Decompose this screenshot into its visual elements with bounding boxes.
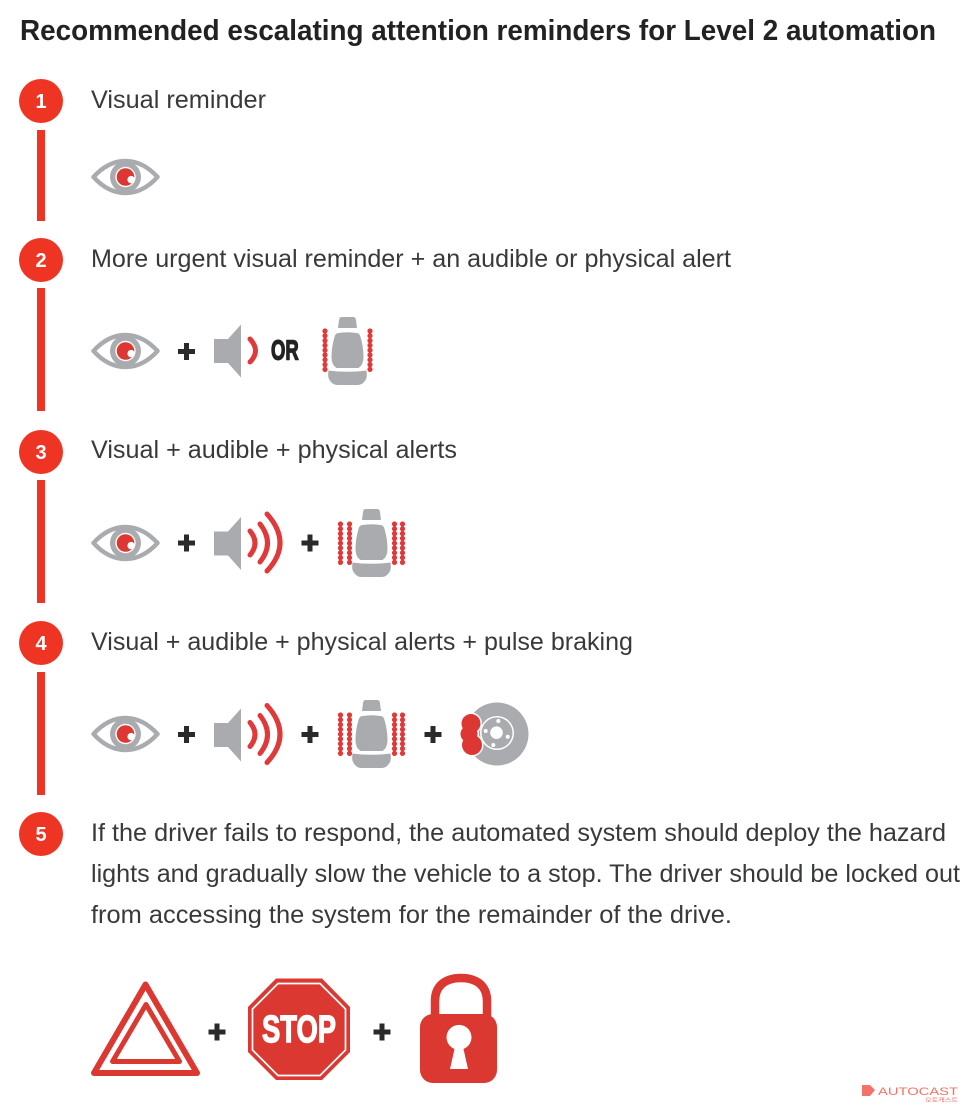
step 2 connector bar (37, 288, 45, 411)
step 1 number badge: 1 (35, 91, 47, 113)
step 2 label: More urgent visual reminder + an audible or physical alert (91, 245, 731, 273)
icon: strongly vibrating seat (340, 700, 402, 768)
plus (302, 534, 318, 552)
plus (302, 726, 318, 743)
step 3 (19, 430, 457, 603)
icon: speaker with three waves (214, 706, 280, 762)
icon: eye (94, 527, 158, 559)
icon: eye (94, 335, 158, 367)
step 4 label: Visual + audible + physical alerts + pulse braking (91, 628, 633, 656)
icon: speaker with three waves (214, 514, 280, 571)
icon: eye (94, 161, 158, 193)
OR label: OR (271, 336, 299, 367)
step 3 number badge (19, 430, 63, 474)
plus (374, 1024, 390, 1040)
step 1 (19, 79, 266, 221)
logo: Autocast watermark (862, 1085, 958, 1104)
step 4 connector bar (37, 672, 45, 795)
plus (178, 534, 195, 552)
logo: Autocast watermark: 오토캐스트 (925, 1096, 958, 1104)
plus (424, 726, 442, 743)
step 5 (19, 812, 960, 1083)
icon: padlock (420, 978, 497, 1083)
icon: brake disc and caliper (460, 702, 528, 766)
icon: stop sign (248, 978, 350, 1080)
icon: vibrating seat (325, 317, 370, 385)
icon: eye (94, 718, 158, 750)
step 3 connector bar (37, 480, 45, 603)
step 1 label: Visual reminder (91, 86, 266, 114)
step 4 number badge: 4 (35, 633, 47, 655)
step 2 number badge (19, 238, 63, 282)
step 2 number badge: 2 (35, 250, 47, 272)
icon: stop sign: STOP (262, 1009, 336, 1051)
step 3 label: Visual + audible + physical alerts (91, 436, 457, 464)
step 5 description: lights and gradually slow the vehicle to a stop. The driver should be locked out (91, 860, 960, 888)
step 5 number badge: 5 (35, 824, 47, 846)
step 3 number badge: 3 (35, 442, 47, 464)
step 5 number badge (19, 812, 63, 856)
step 1 connector bar (37, 130, 45, 221)
icon: strongly vibrating seat (340, 509, 402, 577)
title: Recommended escalating attention reminders for Level 2 automation (20, 15, 936, 47)
plus (178, 343, 195, 360)
step 5 description: from accessing the system for the remainder of the drive. (91, 901, 732, 929)
step 1 number badge (19, 79, 63, 123)
step 2 (19, 238, 731, 411)
step 5 description: If the driver fails to respond, the automated system should deploy the hazard (91, 819, 946, 847)
plus (208, 1024, 226, 1040)
step 5 description (91, 819, 960, 929)
plus (178, 726, 195, 743)
step 4 (19, 621, 633, 795)
logo: Autocast watermark: AUTOCAST (878, 1086, 958, 1098)
icon: hazard triangle (94, 984, 197, 1073)
icon: speaker with one wave (214, 324, 256, 378)
step 4 number badge (19, 621, 63, 665)
